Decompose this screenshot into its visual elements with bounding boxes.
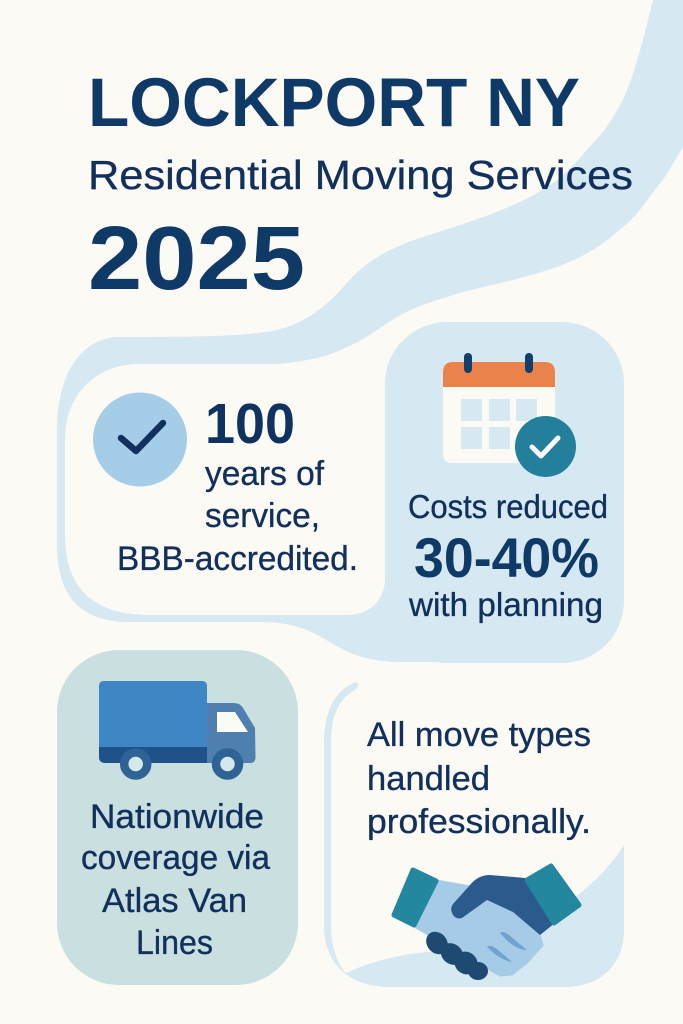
- text: all move types handled professionally: All move types: [367, 716, 591, 754]
- text: costs reduced: Costs reduced: [408, 488, 608, 525]
- text block: 100 years of service: service,: [205, 497, 320, 535]
- icon: truck: [99, 681, 256, 776]
- year: 2025: [88, 209, 305, 309]
- text: with planning: with planning: [408, 586, 603, 623]
- text block: 100 years of service: years of: [205, 455, 325, 493]
- text: nationwide coverage via Atlas Van Lines: Atlas Van: [102, 882, 247, 920]
- text block: 100 years of service: 100: [205, 392, 295, 456]
- text block: 100 years of service: BBB-accredited.: [117, 540, 358, 578]
- text: all move types handled professionally: [367, 716, 591, 841]
- heading: Lockport NY: LOCKPORT NY: [88, 64, 580, 141]
- stat: 30-40%: 30-40%: [414, 526, 599, 589]
- title: [88, 64, 633, 309]
- text: all move types handled professionally: professionally.: [367, 803, 591, 841]
- text: nationwide coverage via Atlas Van Lines: [81, 798, 270, 962]
- subheading: Residential Moving Services: [88, 152, 633, 198]
- panel: all move types: [324, 682, 624, 987]
- text: all move types handled professionally: handled: [367, 760, 490, 798]
- text block: 100 years of service: [117, 392, 358, 578]
- panel: costs reduced: [385, 322, 624, 663]
- icon: handshake: [394, 866, 579, 980]
- icon: calendar: [443, 353, 576, 477]
- text: nationwide coverage via Atlas Van Lines: Nationwide: [90, 798, 264, 836]
- icon: check circle: [93, 392, 187, 486]
- text: nationwide coverage via Atlas Van Lines: coverage via: [81, 839, 270, 877]
- background ribbon: [57, 0, 683, 662]
- text: nationwide coverage via Atlas Van Lines: Lines: [136, 924, 213, 962]
- panel outline and lower wave: [324, 682, 624, 987]
- panel: nationwide coverage: [57, 650, 298, 985]
